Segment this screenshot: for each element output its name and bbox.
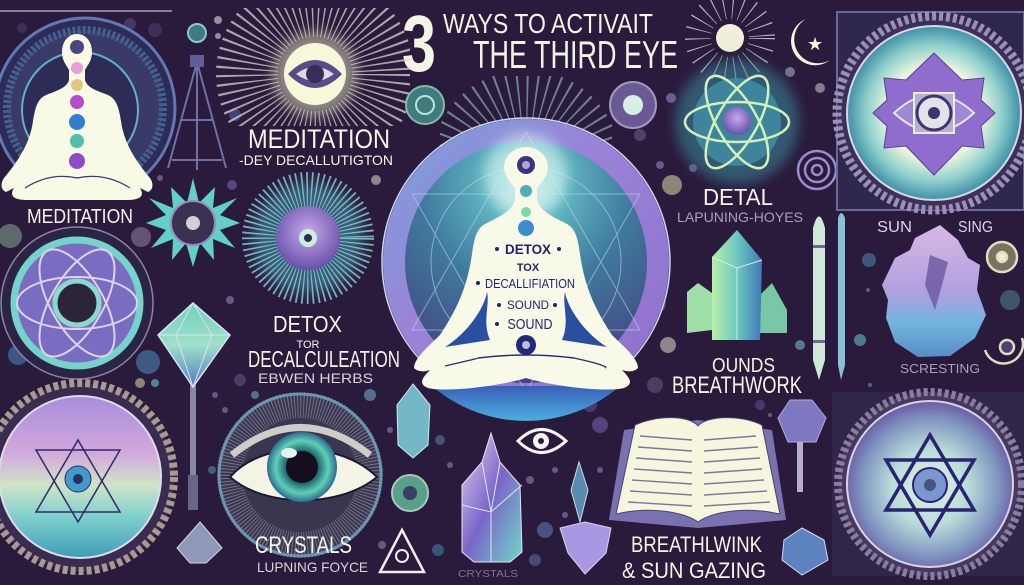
- decorative top line: [0, 10, 172, 12]
- panel: star disc: [832, 392, 1024, 576]
- heading: detal: DETAL: [703, 184, 773, 210]
- title: THE THIRD EYE: [473, 34, 678, 77]
- heading: meditation: -DEY DECALLUTIGTON: [239, 152, 393, 168]
- icon: crystal cluster: [687, 230, 787, 340]
- icon: gem: [560, 522, 611, 574]
- icon: triangle eye: [380, 530, 424, 572]
- icon: ornaments right: [985, 242, 1023, 363]
- panel: disc bottom left: [0, 383, 174, 571]
- icon: burst left: [253, 183, 363, 293]
- icon: polyhedron: [782, 528, 828, 575]
- heading: sounds breathwork: OUNDS: [712, 355, 775, 377]
- heading: sun sing: SUN: [877, 219, 912, 236]
- icon: crystal bottle: [462, 433, 522, 562]
- heading: breathlwink and sun gazing: [622, 532, 766, 583]
- icon: crystal wand: [158, 303, 230, 510]
- panel: central figure: SOUND: [507, 298, 549, 312]
- panel: meditation figure: [0, 18, 175, 200]
- icon: tripod: [168, 24, 226, 170]
- panel: central figure: TOX: [517, 262, 540, 274]
- heading: detox: DECALCULEATION: [248, 346, 400, 372]
- heading: detal: [677, 184, 803, 225]
- heading: meditation: MEDITATION: [248, 124, 390, 154]
- icon: teardrop crystal: [571, 462, 588, 522]
- panel: central figure: DETOX: [505, 241, 552, 257]
- heading: sounds breathwork: [672, 355, 802, 399]
- icon: eye small: [518, 430, 566, 452]
- icon: atom: [675, 60, 799, 184]
- icon: orb right of centre: [610, 82, 656, 128]
- heading: sounds breathwork: BREATHWORK: [672, 372, 802, 399]
- icon: hex crystal: [397, 384, 430, 458]
- title: 3: [402, 0, 436, 88]
- icon: spiral: [798, 151, 836, 189]
- icon: pen tools: [813, 213, 845, 380]
- icon: crystal rock: [882, 225, 986, 357]
- heading: detox: [248, 311, 400, 386]
- text: cresting label: SCRESTING: [900, 361, 980, 376]
- panel: central figure: SOUND: [508, 316, 553, 333]
- heading: crystals: CRYSTALS: [255, 532, 352, 559]
- panel: large eye: [219, 394, 381, 556]
- heading: sun sing: [877, 219, 993, 236]
- title: [402, 0, 678, 88]
- heading: breathlwink and sun gazing: BREATHLWINK: [631, 532, 762, 557]
- panel: atom disc left: [1, 227, 153, 379]
- text: crystals small: CRYSTALS: [458, 569, 518, 580]
- icon: star teal: [146, 178, 240, 267]
- icon: crescent and star: [791, 19, 830, 65]
- icon: orb ornament: [392, 475, 428, 511]
- icon: goblet: [778, 400, 826, 492]
- heading: detox: EBWEN HERBS: [258, 370, 373, 386]
- heading: sun sing: SING: [958, 219, 993, 236]
- panel: central figure: [382, 115, 670, 421]
- heading: breathlwink and sun gazing: & SUN GAZING: [622, 558, 766, 583]
- heading: detal: LAPUNING-HOYES: [677, 209, 803, 225]
- icon: orb left of centre: [406, 86, 444, 124]
- heading: crystals: [255, 532, 368, 575]
- heading: crystals: LUPNING FOYCE: [257, 559, 368, 575]
- icon: crescent and star: ★: [807, 34, 823, 54]
- heading: meditation left: MEDITATION: [27, 206, 133, 228]
- heading: meditation: [239, 124, 393, 168]
- icon: sun: [698, 6, 762, 70]
- panel: central figure: DECALLIFIATION: [485, 276, 575, 291]
- heading: detox: TOR: [296, 339, 320, 351]
- icon: open book: [609, 418, 786, 528]
- panel: eye burst top: [247, 6, 383, 142]
- heading: detox: DETOX: [273, 311, 342, 337]
- icon: small gem: [177, 522, 222, 563]
- panel: mandala top right: [837, 12, 1024, 210]
- title: WAYS TO ACTIVAIT: [443, 8, 653, 39]
